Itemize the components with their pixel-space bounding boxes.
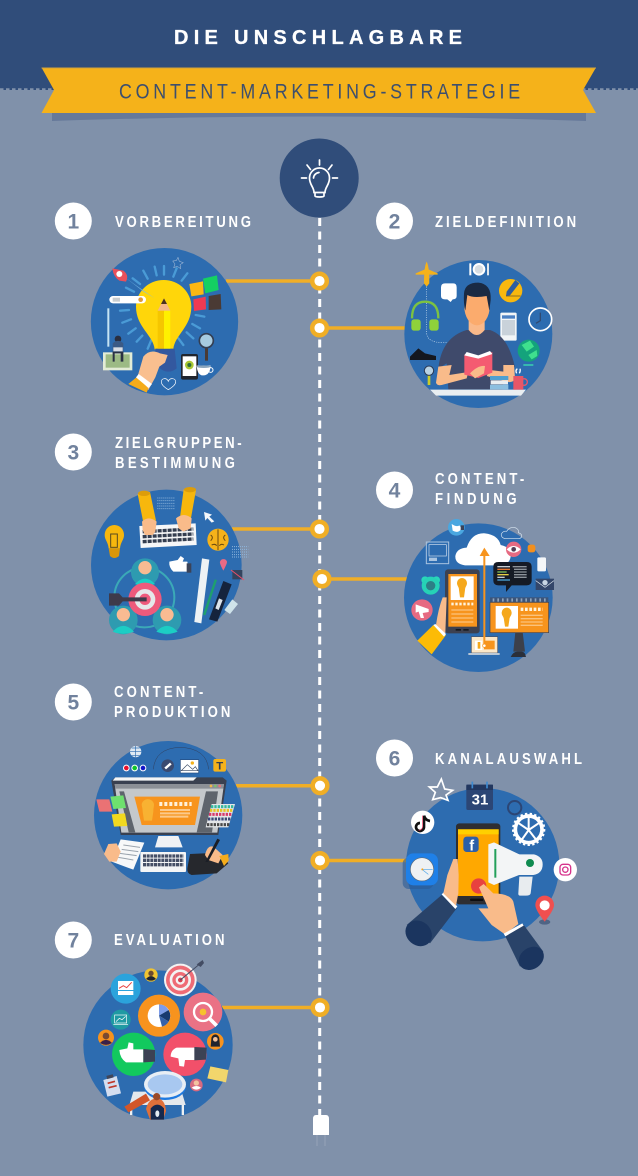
step 7 heading: EVALUATION bbox=[114, 932, 225, 949]
brain bbox=[207, 529, 229, 551]
T tool icon: T bbox=[216, 760, 223, 772]
arms and hands bbox=[138, 487, 196, 535]
thumb up bbox=[169, 556, 191, 573]
shoe bbox=[410, 348, 436, 360]
avatar left bbox=[98, 1030, 114, 1046]
calendar bbox=[466, 782, 493, 810]
monitor outline bbox=[426, 542, 449, 564]
step 2 heading bbox=[376, 202, 576, 240]
illustration 6: channel selection bbox=[400, 779, 577, 975]
megaphone badge bbox=[411, 599, 433, 621]
left arm bbox=[400, 859, 459, 952]
illustration 1: idea bulb bbox=[91, 248, 238, 395]
drawing tablet and hand bbox=[187, 839, 229, 875]
illustration 3: target group bbox=[91, 487, 248, 640]
laptop bbox=[468, 637, 500, 655]
phone bbox=[456, 823, 500, 904]
laptop badge bbox=[111, 1010, 131, 1030]
heart outline bbox=[161, 379, 176, 390]
chart badge bbox=[111, 974, 141, 1004]
plane bbox=[416, 262, 438, 287]
phone bbox=[181, 354, 198, 380]
step 4 heading: CONTENT- bbox=[435, 471, 524, 488]
triangle ruler corner bbox=[231, 570, 244, 580]
small gear bbox=[508, 801, 521, 814]
pencil bbox=[158, 298, 170, 349]
tablet bbox=[445, 569, 480, 633]
keyboard bbox=[140, 852, 186, 872]
magnifier bbox=[424, 366, 434, 385]
network ring bbox=[114, 567, 174, 627]
speech bubble bbox=[441, 283, 457, 302]
illustration 7: evaluation bbox=[83, 960, 233, 1120]
bulb base bbox=[155, 349, 177, 372]
dotted path bbox=[427, 287, 479, 353]
timeline end plug bbox=[313, 1115, 329, 1146]
monitor stand bbox=[155, 836, 183, 847]
ribbon banner: CONTENT-MARKETING-STRATEGIE bbox=[119, 80, 520, 104]
step 3 heading: ZIELGRUPPEN- bbox=[115, 435, 242, 452]
illustration 2: reader bbox=[404, 260, 552, 408]
tiktok badge bbox=[411, 811, 434, 834]
table and magnifier bbox=[129, 1071, 186, 1115]
cursor arrow bbox=[204, 512, 214, 523]
magnifier bbox=[199, 334, 213, 361]
billboard bbox=[490, 597, 549, 657]
colour chart bbox=[206, 804, 235, 827]
header band bbox=[0, 0, 638, 90]
vector curve bbox=[153, 747, 209, 769]
step 6 heading: KANALAUSWAHL bbox=[435, 751, 582, 768]
illustration 5: content production bbox=[94, 741, 242, 889]
cloud bbox=[455, 533, 511, 565]
twitter badge bbox=[448, 519, 465, 536]
pencil bbox=[203, 579, 217, 615]
illustration 4: content finding bbox=[404, 519, 554, 672]
hand holding tablet bbox=[417, 597, 447, 654]
step 5 heading: CONTENT- bbox=[114, 684, 203, 701]
avatar top bbox=[144, 968, 158, 982]
tablet bbox=[500, 313, 517, 341]
alarm clock bbox=[421, 576, 440, 595]
step 6 heading: 6 bbox=[389, 748, 400, 770]
search bar bbox=[109, 296, 146, 303]
small avatar bbox=[190, 1079, 203, 1091]
pie chart badge bbox=[138, 995, 180, 1037]
sticky note bbox=[207, 1066, 228, 1082]
step 3 heading: 3 bbox=[67, 442, 79, 464]
step 6 heading bbox=[376, 740, 582, 776]
clipboard bbox=[103, 1074, 121, 1097]
map pin bbox=[535, 896, 554, 925]
headphones bbox=[411, 302, 439, 331]
right hand bbox=[478, 884, 548, 975]
step 4 heading: 4 bbox=[389, 480, 401, 502]
RGB dots bbox=[123, 765, 146, 771]
step 1 heading: 1 bbox=[67, 210, 79, 234]
instagram badge bbox=[554, 858, 577, 881]
pen line bbox=[107, 308, 109, 347]
image icon bbox=[180, 760, 199, 773]
red mug bbox=[513, 369, 527, 390]
arms bbox=[436, 365, 468, 385]
orange tag bbox=[528, 545, 535, 552]
calendar: 31 bbox=[472, 791, 488, 808]
map pin bbox=[220, 559, 227, 571]
code bubble bbox=[493, 562, 532, 592]
step 7 heading: 7 bbox=[67, 930, 79, 952]
step 5 heading bbox=[55, 684, 230, 721]
T tool icon bbox=[213, 759, 226, 772]
step connectors bbox=[222, 281, 407, 1008]
icon: light bulb badge bbox=[280, 138, 359, 218]
man bbox=[436, 283, 515, 389]
book stack bbox=[490, 376, 508, 389]
facebook icon bbox=[463, 837, 479, 855]
target bbox=[164, 960, 204, 996]
envelope bbox=[536, 579, 554, 590]
globe bbox=[518, 340, 540, 365]
clock bbox=[529, 308, 552, 331]
step 1 heading bbox=[55, 202, 251, 240]
star outline bbox=[173, 257, 183, 269]
pencil badge bbox=[499, 279, 522, 302]
step 4 heading bbox=[376, 471, 524, 508]
step 2 heading: ZIELDEFINITION bbox=[435, 214, 576, 231]
colour swatches bbox=[189, 275, 221, 311]
step 3 heading bbox=[55, 434, 242, 472]
clock app icon bbox=[403, 853, 438, 889]
step 7 heading bbox=[55, 922, 224, 958]
keyboard bbox=[139, 523, 197, 548]
step 2 heading: 2 bbox=[389, 210, 400, 234]
book bbox=[464, 351, 492, 378]
eraser bbox=[224, 599, 238, 614]
person with telescope bbox=[124, 1093, 166, 1120]
step 5 heading: PRODUKTION bbox=[114, 704, 230, 721]
person on banknote bbox=[103, 336, 132, 370]
marker bbox=[209, 581, 232, 622]
timeline nodes bbox=[312, 274, 329, 1015]
bulb bbox=[136, 280, 191, 349]
people bbox=[109, 558, 181, 634]
star outline bbox=[429, 779, 453, 800]
small phone bbox=[537, 557, 546, 571]
monitor bbox=[111, 777, 227, 835]
large gear bbox=[513, 814, 544, 845]
small cloud outline bbox=[501, 527, 522, 539]
ribbon banner bbox=[42, 68, 596, 121]
bulb bbox=[105, 525, 124, 558]
pen badge bbox=[161, 759, 174, 772]
avatar right bbox=[207, 1033, 224, 1050]
globe icon bbox=[130, 746, 141, 757]
papers and left hand bbox=[104, 839, 144, 870]
hand bbox=[128, 351, 168, 393]
step 1 heading: VORBEREITUNG bbox=[115, 214, 251, 231]
sticky notes bbox=[96, 795, 127, 827]
megaphone bbox=[488, 842, 543, 896]
upload arrow bbox=[480, 548, 490, 647]
thumbs up badge bbox=[112, 1033, 155, 1076]
ruler bbox=[194, 558, 209, 623]
step 5 heading: 5 bbox=[67, 692, 79, 714]
step 3 heading: BESTIMMUNG bbox=[115, 455, 235, 472]
rocket bbox=[112, 268, 155, 298]
thumbs down badge bbox=[163, 1033, 207, 1076]
coffee cup bbox=[197, 365, 213, 375]
title: DIE UNSCHLAGBARE bbox=[174, 27, 462, 49]
eye badge bbox=[506, 542, 521, 557]
step 4 heading: FINDUNG bbox=[435, 491, 517, 508]
desk bbox=[430, 390, 526, 396]
target bbox=[109, 583, 162, 616]
plate and cutlery bbox=[469, 263, 489, 276]
search badge bbox=[184, 993, 222, 1031]
dot grids bbox=[157, 498, 248, 557]
timeline dashed line bbox=[318, 218, 321, 1116]
facebook icon: f bbox=[469, 839, 474, 855]
